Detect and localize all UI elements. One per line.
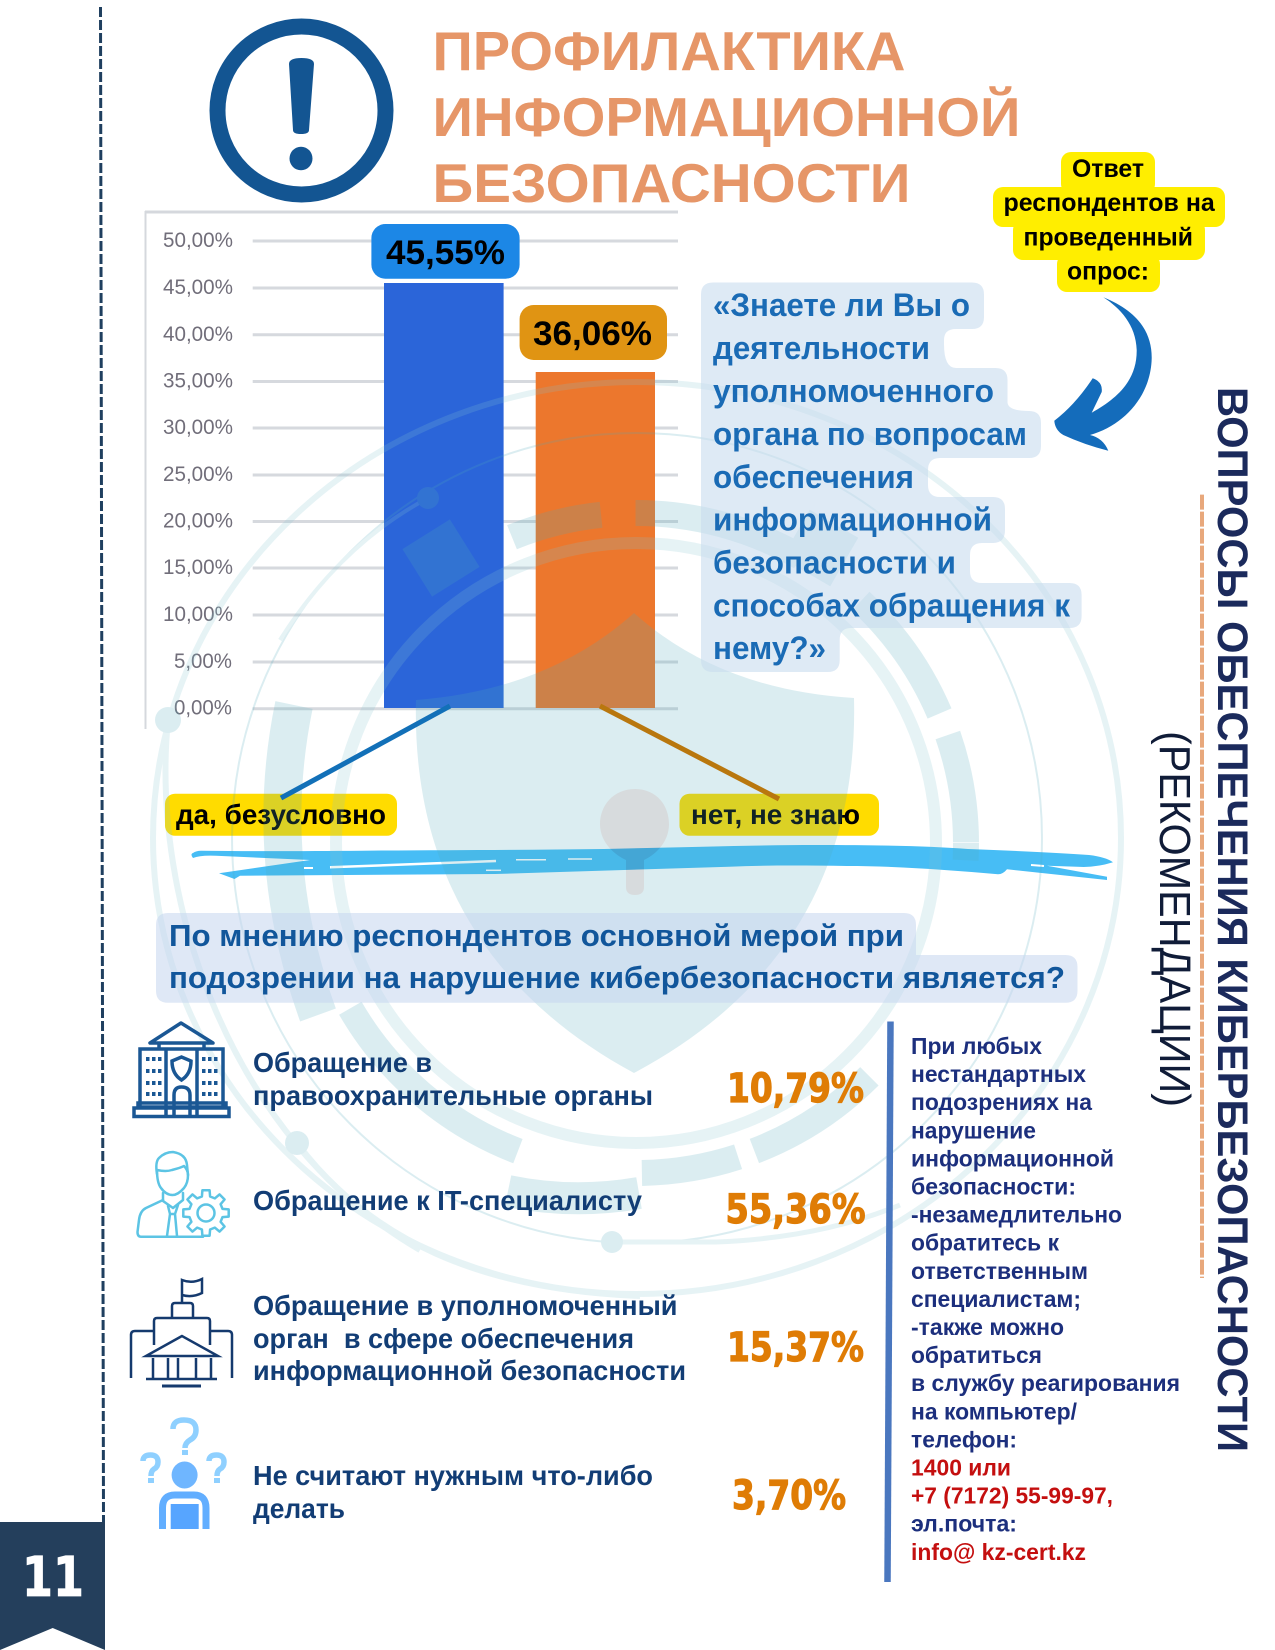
axis labels: 30,00% <box>163 416 233 439</box>
callout: respondents answer <box>993 152 1225 292</box>
icon: person with questions <box>143 1420 224 1529</box>
orange dashed vertical line <box>1200 495 1204 1278</box>
recommendation text: информационной <box>911 1145 1114 1171</box>
background watermark: cyber shield <box>153 382 1121 1296</box>
value pill 45,55% <box>371 224 520 279</box>
row text: do nothing: Не считают нужным что-либо <box>253 1460 653 1491</box>
recommendation text: ответственным <box>911 1258 1088 1284</box>
value 3,70%: 3,70% <box>732 1473 846 1519</box>
vertical divider bar <box>888 1022 890 1582</box>
axis labels: 0,00% <box>174 696 232 720</box>
connector line brown <box>600 706 779 799</box>
row text: authorized body: орган в сфере обеспечения <box>253 1323 634 1354</box>
vertical subheading: (РЕКОМЕНДАЦИИ) <box>1150 731 1199 1107</box>
recommendation text: +7 (7172) 55-99-97, <box>911 1483 1113 1509</box>
brush stroke divider <box>192 845 1113 880</box>
recommendation text: нестандартных <box>911 1061 1086 1087</box>
page number badge <box>0 1522 105 1650</box>
legend pill: нет, не знаю <box>680 794 879 836</box>
bar: нет <box>536 372 655 708</box>
value 55,36%: 55,36% <box>726 1187 866 1233</box>
recommendation text: обратиться <box>911 1342 1042 1368</box>
axis labels: 15,00% <box>163 556 233 579</box>
connector line blue <box>281 706 450 798</box>
value 10,79%: 10,79% <box>727 1066 864 1112</box>
icon: IT specialist <box>138 1152 229 1237</box>
section question: подозрении на нарушение кибербезопасности является? <box>169 960 1065 995</box>
question text box: информационной <box>713 502 992 538</box>
recommendation text: подозрениях на <box>911 1089 1092 1115</box>
row text: do nothing <box>253 1460 653 1524</box>
row text: law enforcement <box>253 1047 653 1111</box>
legend pill: нет, не знаю: нет, не знаю <box>691 799 860 830</box>
icon: government building <box>131 1279 232 1386</box>
axis labels: 20,00% <box>163 510 233 532</box>
row text: law enforcement: Обращение в <box>253 1047 432 1078</box>
question text box: уполномоченного <box>713 373 994 409</box>
bar chart <box>145 212 678 729</box>
left dashed line <box>100 7 104 1522</box>
title <box>432 20 1020 214</box>
question text box: «Знаете ли Вы о <box>713 287 970 323</box>
axis labels: 40,00% <box>163 323 233 346</box>
icon: curved arrow <box>1054 297 1152 451</box>
recommendation text: info@ kz-cert.kz <box>911 1539 1086 1565</box>
row text: do nothing: делать <box>253 1493 345 1524</box>
axis labels: 5,00% <box>174 650 232 673</box>
recommendation text: 1400 или <box>911 1454 1011 1480</box>
recommendation text: эл.почта: <box>911 1511 1017 1537</box>
recommendation text: в службу реагирования <box>911 1370 1180 1396</box>
question text box <box>701 282 1082 672</box>
row text: authorized body <box>253 1290 686 1386</box>
question text box: обеспечения <box>713 459 914 495</box>
callout: respondents answer: опрос: <box>1067 258 1149 286</box>
section question: По мнению респондентов основной мерой при <box>169 918 904 953</box>
question text box: способах обращения к <box>713 588 1071 624</box>
title: ИНФОРМАЦИОННОЙ <box>432 85 1020 148</box>
question text box: безопасности и <box>713 544 956 580</box>
value pill 45,55%: 45,55% <box>386 234 505 272</box>
axis labels: 50,00% <box>163 229 233 252</box>
icon: police building <box>134 1023 229 1116</box>
question text box: деятельности <box>713 330 930 366</box>
callout: respondents answer: проведенный <box>1024 224 1193 252</box>
row text: IT specialist: Обращение к IT-специалисту <box>253 1185 642 1216</box>
value 15,37%: 15,37% <box>727 1325 864 1371</box>
value pill 36,06%: 36,06% <box>533 315 652 353</box>
axis labels: 10,00% <box>163 603 233 626</box>
icon: exclamation circle <box>218 26 386 194</box>
value pill 36,06% <box>520 305 667 360</box>
recommendation text: специалистам; <box>911 1286 1081 1312</box>
row text: authorized body: информационной безопасности <box>253 1355 686 1386</box>
title: БЕЗОПАСНОСТИ <box>432 152 910 214</box>
row text: authorized body: Обращение в уполномоченный <box>253 1290 678 1321</box>
axis labels: 25,00% <box>163 463 233 486</box>
row text: law enforcement: правоохранительные органы <box>253 1080 653 1111</box>
title: ПРОФИЛАКТИКА <box>432 20 906 82</box>
legend pill: да, безусловно <box>165 794 397 836</box>
recommendation text: на компьютер/ <box>911 1398 1078 1424</box>
callout: respondents answer: респондентов на <box>1004 189 1216 217</box>
recommendation text: -незамедлительно <box>911 1202 1122 1228</box>
recommendation text <box>911 1033 1180 1565</box>
recommendation text: -также можно <box>911 1314 1064 1340</box>
section question <box>156 913 1078 1003</box>
recommendation text: телефон: <box>911 1426 1017 1452</box>
axis labels: 45,00% <box>163 276 233 299</box>
recommendation text: При любых <box>911 1033 1042 1059</box>
vertical heading: ВОПРОСЫ ОБЕСПЕЧЕНИЯ КИБЕРБЕЗОПАСНОСТИ <box>1208 387 1256 1452</box>
recommendation text: безопасности: <box>911 1174 1076 1200</box>
page number badge: 11 <box>22 1545 84 1609</box>
bar: да <box>384 283 504 708</box>
axis labels <box>163 229 233 720</box>
recommendation text: обратитесь к <box>911 1230 1059 1256</box>
axis labels: 35,00% <box>163 370 233 392</box>
callout: respondents answer: Ответ <box>1072 155 1144 183</box>
question text box: нему?» <box>713 630 826 666</box>
legend pill: да, безусловно: да, безусловно <box>176 799 386 830</box>
question text box: органа по вопросам <box>713 416 1027 452</box>
recommendation text: нарушение <box>911 1117 1036 1143</box>
